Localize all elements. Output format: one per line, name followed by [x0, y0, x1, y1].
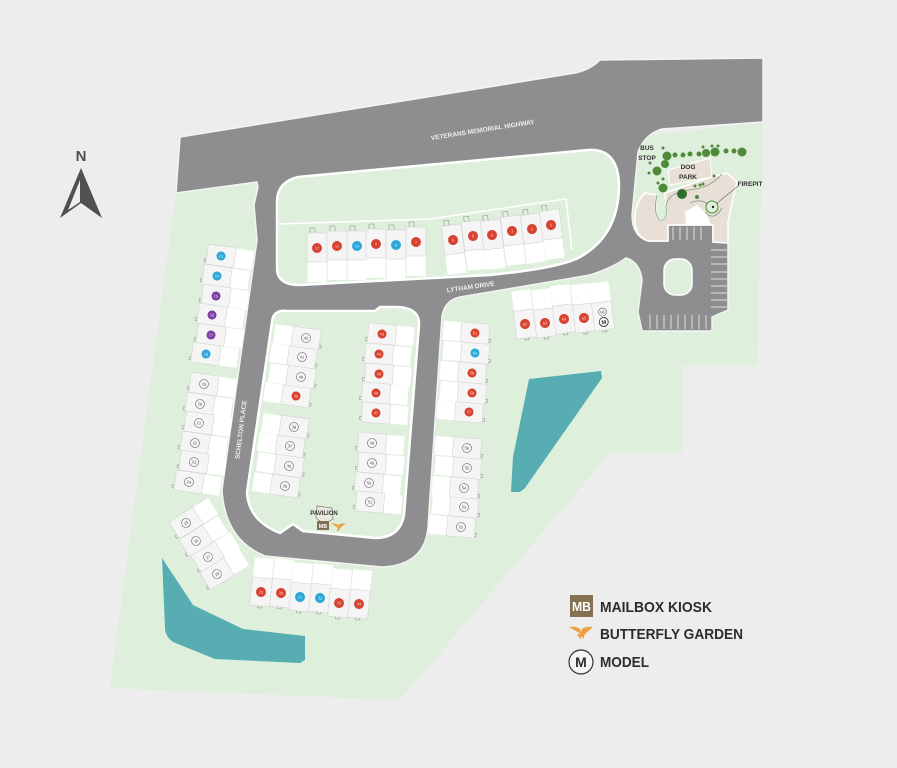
lots: central column 35-38	[252, 413, 311, 498]
legend: mailbox kiosk	[570, 595, 712, 617]
lots: northeast row 62-66 with model: 66	[600, 309, 606, 315]
lots: central column 39-42	[263, 324, 323, 408]
lots: north row east	[441, 204, 565, 275]
lots: east column 57-61: 59	[470, 370, 475, 376]
lots: central column 35-38: 37	[287, 443, 293, 449]
lots: northeast row 62-66 with model: 63	[542, 320, 548, 326]
lots: north row west: 10	[355, 244, 360, 248]
park trees	[648, 144, 746, 199]
lots: southwest diagonal 25-28: 28	[214, 570, 221, 577]
lots: northeast row 62-66 with model: M	[601, 320, 607, 326]
lots: west column 19-24: 22	[192, 440, 198, 446]
lots: central column 39-42: 39	[293, 393, 299, 399]
lots: north row east: 5	[472, 233, 475, 239]
dog park: DOG	[681, 164, 695, 171]
lots: west column 13-18: 16	[209, 312, 215, 318]
lots: north row east: 4	[491, 232, 494, 238]
lots: central column 35-38: 36	[286, 463, 292, 469]
legend: mailbox kiosk: MAILBOX KIOSK	[600, 599, 712, 616]
lots: central east column 43-47: 46	[374, 390, 379, 396]
park hardscape	[635, 173, 737, 243]
highway label: VETERANS MEMORIAL HIGHWAY	[430, 119, 536, 142]
lots: southwest diagonal 25-28: 25	[183, 519, 190, 526]
lots: north row east: 1	[550, 222, 553, 228]
firepit	[706, 181, 762, 213]
lots: central column 39-42: 40	[298, 374, 304, 380]
lots: west column 13-18: 18	[203, 351, 209, 357]
lots: north row east: 3	[511, 228, 514, 234]
lots: central east column 48-51: 48	[370, 440, 375, 446]
park white walkway	[685, 205, 711, 225]
lots: central column 35-38: 35	[282, 483, 288, 489]
lots: west column 19-24: 24	[186, 479, 192, 485]
lots: southwest diagonal 25-28	[167, 498, 249, 591]
north arrow: N	[76, 148, 86, 165]
street label: Lytham Drive: LYTHAM DRIVE	[446, 281, 496, 294]
dog park: PARK	[679, 174, 697, 181]
lots: west column 19-24: 20	[197, 401, 203, 407]
lots: central east column 43-47: 43	[380, 331, 385, 337]
lots: central east column 48-51: 50	[367, 480, 372, 486]
lots: north row west: 8	[395, 242, 398, 248]
lots: east column 52-56: 54	[462, 485, 467, 491]
lots: east column 52-56: 53	[462, 504, 467, 510]
legend: butterfly garden: BUTTERFLY GARDEN	[600, 626, 743, 643]
legend: mailbox kiosk: MB	[572, 599, 591, 614]
lots: east column 57-61: 58	[470, 390, 475, 396]
lots: northeast row 62-66 with model: 62	[522, 321, 528, 327]
bus stop label	[638, 145, 656, 162]
island: central block green	[247, 307, 419, 538]
lots: north row west: 12	[315, 246, 320, 250]
parking stalls	[650, 227, 727, 329]
lots: south row 29-34: 31	[298, 594, 303, 600]
lots: east column 57-61	[436, 320, 492, 423]
fence line	[278, 199, 572, 250]
lots: central east column 43-47: 45	[377, 371, 382, 377]
lots: west column 13-18: 14	[214, 273, 220, 279]
pond east	[511, 371, 602, 492]
north arrow	[60, 148, 102, 218]
lots: west column 19-24: 23	[191, 459, 197, 465]
lots: northeast row 62-66 with model	[511, 281, 615, 341]
lots: east column 57-61: 57	[467, 409, 472, 415]
lots: west column 19-24	[172, 372, 237, 496]
lots: east column 52-56: 52	[459, 524, 464, 530]
lots: central east column 43-47: 47	[374, 410, 379, 416]
legend	[569, 595, 743, 674]
dog park	[668, 158, 712, 185]
lots: central east column 43-47	[359, 323, 415, 426]
park paths	[655, 174, 722, 220]
bus stop label: STOP	[638, 155, 656, 162]
lots: east column 57-61: 61	[473, 330, 478, 336]
lots: central east column 48-51	[352, 432, 405, 515]
parking island	[664, 259, 692, 295]
lots: north row west: 7	[415, 240, 418, 244]
lots: southwest diagonal 25-28: 26	[193, 537, 200, 544]
lots: south row 29-34: 34	[357, 601, 362, 607]
lots: west column 13-18: 15	[213, 293, 219, 299]
legend: model	[569, 650, 649, 674]
lots: north row east: 2	[531, 226, 534, 232]
lots: east column 52-56	[428, 435, 484, 538]
lots: north row west: 9	[375, 242, 378, 246]
road network	[176, 58, 763, 567]
lots: northeast row 62-66 with model: 65	[581, 315, 587, 321]
lots: central column 35-38: 38	[291, 424, 297, 430]
legend: model: M	[575, 654, 587, 670]
pavilion: MB	[319, 524, 327, 530]
bus stop label: BUS	[640, 145, 655, 152]
lots: east column 57-61: 60	[473, 350, 478, 356]
lots: south row 29-34: 29	[259, 589, 264, 595]
lots: north row east: 6	[452, 237, 455, 243]
lots: south row 29-34: 32	[318, 595, 323, 601]
lots: southwest diagonal 25-28: 27	[205, 553, 212, 560]
lots: east column 52-56: 55	[465, 465, 470, 471]
lots: south row 29-34	[249, 557, 372, 621]
lots: west column 19-24: 19	[201, 381, 207, 387]
lots: central east column 48-51: 51	[368, 499, 373, 505]
lots: north row west	[307, 222, 426, 282]
island: north lots green	[277, 150, 619, 285]
green site land	[110, 122, 763, 700]
pavilion: PAVILION	[310, 511, 338, 517]
lots: south row 29-34: 30	[279, 590, 284, 596]
lots: northeast row 62-66 with model: 64	[561, 316, 567, 322]
lots: west column 19-24: 21	[196, 420, 202, 426]
lots: central column 39-42: 42	[303, 335, 309, 341]
lots: central east column 43-47: 44	[377, 351, 382, 357]
street label: Schelton Place: SCHELTON PLACE	[234, 399, 249, 460]
lots: central east column 48-51: 49	[370, 460, 375, 466]
lots: west column 13-18: 13	[218, 253, 224, 259]
lots: south row 29-34: 33	[337, 600, 342, 606]
legend: model: MODEL	[600, 654, 649, 671]
pond southwest	[162, 558, 305, 663]
pavilion	[310, 506, 346, 531]
lots: west column 13-18: 17	[208, 332, 214, 338]
lots: north row west: 11	[335, 244, 340, 248]
lots: central column 39-42: 41	[299, 354, 305, 360]
lots: west column 13-18	[189, 244, 254, 368]
firepit: FIREPIT	[738, 181, 762, 188]
lots: east column 52-56: 56	[465, 445, 470, 451]
